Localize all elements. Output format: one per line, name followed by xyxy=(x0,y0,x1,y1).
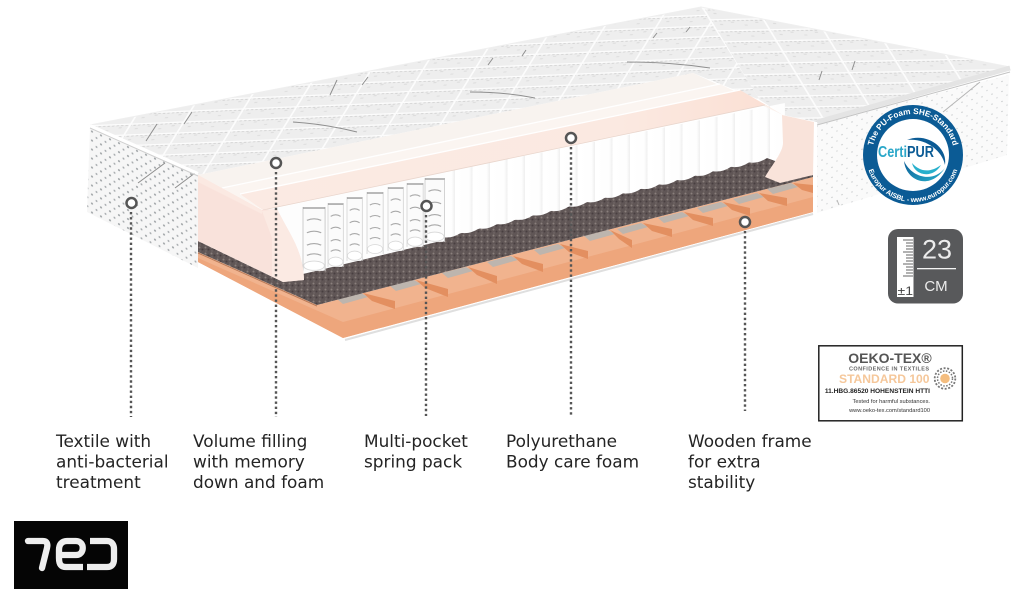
callout line: volume filling xyxy=(271,158,281,417)
label: wooden frame: for extra xyxy=(688,452,761,472)
label: springs: Multi-pocket xyxy=(364,431,468,451)
label: volume filling: down and foam xyxy=(193,472,324,492)
mattress top quilted face xyxy=(90,7,1010,175)
right textile side panel xyxy=(817,68,1010,213)
badge: CertiPUR: PUR xyxy=(907,144,934,161)
polyurethane foam layers xyxy=(198,73,783,210)
callout line: springs xyxy=(422,201,432,416)
label: springs: spring pack xyxy=(364,452,462,472)
icon: oeko-tex flower xyxy=(935,368,955,389)
callout line: wooden frame xyxy=(740,217,750,411)
badge: CertiPUR xyxy=(863,105,963,205)
near foam edge block xyxy=(198,175,304,282)
label: textile: anti-bacterial xyxy=(56,452,169,472)
badge: CertiPUR: Certi xyxy=(878,144,907,161)
wooden frame xyxy=(198,177,813,340)
mattress illustration xyxy=(87,7,1010,340)
certificate: OEKO-TEX: CONFIDENCE IN TEXTILES xyxy=(849,367,929,373)
badge: CertiPUR: Europur AISBL - www.europur.com xyxy=(868,168,958,202)
callout line: textile xyxy=(126,198,136,417)
certificate: OEKO-TEX: www.oeko-tex.com/standard100 xyxy=(848,408,930,414)
certificate: OEKO-TEX: OEKO-TEX® xyxy=(848,350,932,366)
certificate: OEKO-TEX: STANDARD 100 xyxy=(839,372,930,386)
label: volume filling: Volume filling xyxy=(193,431,307,451)
certificate: OEKO-TEX xyxy=(819,346,962,421)
multi-pocket springs, closed pockets xyxy=(443,103,785,238)
height badge: 23 cm xyxy=(888,229,963,304)
height badge: 23 cm: CM xyxy=(924,278,948,295)
multi-pocket springs, exposed coils xyxy=(277,172,445,274)
ruler icon: ±1 xyxy=(898,286,913,298)
certificate: OEKO-TEX: Tested for harmful substances. xyxy=(853,399,930,405)
far foam edge block xyxy=(765,115,814,183)
label: wooden frame: Wooden frame xyxy=(688,431,812,451)
label: polyurethane: Polyurethane xyxy=(506,431,617,451)
wooden slats xyxy=(363,183,813,309)
dark fibre layer xyxy=(198,158,813,305)
label: wooden frame: stability xyxy=(688,472,755,492)
label: textile: treatment xyxy=(56,472,141,492)
badge: CertiPUR: The PU-Foam SHE-Standard xyxy=(868,108,959,146)
logo: TED xyxy=(14,521,128,589)
label: volume filling: with memory xyxy=(193,452,305,472)
slat gaps xyxy=(337,183,798,304)
certificate: OEKO-TEX: 11.HBG.86520 HOHENSTEIN HTTI xyxy=(825,388,930,395)
left textile side panel xyxy=(87,126,198,268)
callout line: polyurethane xyxy=(566,133,576,416)
height badge: 23 cm: 23 xyxy=(922,234,952,264)
label: polyurethane: Body care foam xyxy=(506,452,639,472)
label: textile: Textile with xyxy=(55,431,151,451)
